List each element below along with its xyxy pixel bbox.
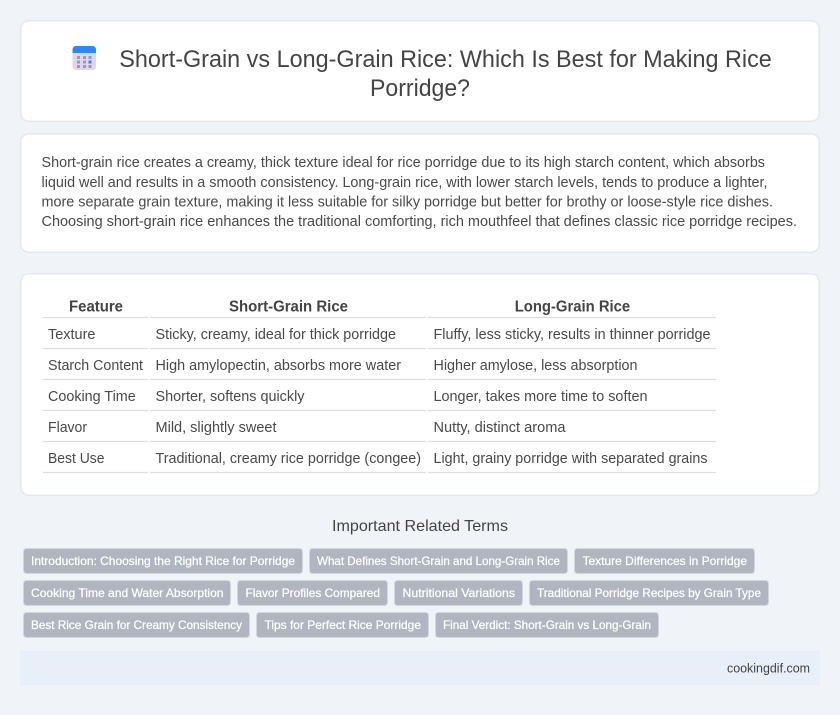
row: cooking time: Longer, takes more time to soften (434, 389, 648, 405)
chip: Tips for Perfect Rice Porridge (264, 618, 421, 632)
row: cooking time (43, 389, 716, 410)
panel: summary paragraph (21, 134, 819, 252)
title (119, 46, 772, 102)
summary text: more separate grain texture, making it less suitable for silky porridge but better for brothy or loose-style rice dishes. (42, 194, 773, 210)
table header: Feature (69, 298, 123, 316)
row: texture: Sticky, creamy, ideal for thick porridge (156, 327, 396, 343)
chip: Traditional Porridge Recipes by Grain Type (537, 586, 761, 600)
chip (310, 548, 568, 574)
chip (24, 580, 230, 606)
table header: Short-Grain Rice (229, 298, 348, 316)
summary text (42, 155, 797, 230)
title: Porridge? (370, 75, 470, 102)
chip (574, 548, 754, 574)
summary text: Choosing short-grain rice enhances the traditional comforting, rich mouthfeel that defines classic rice porridge recipes. (42, 214, 797, 230)
row: starch content: Starch Content (48, 358, 143, 374)
chip: Nutritional Variations (402, 586, 515, 600)
chip: What Defines Short-Grain and Long-Grain Rice (317, 554, 560, 568)
heading: related terms: Important Related Terms (332, 518, 508, 535)
row: starch content: Higher amylose, less absorption (434, 358, 638, 374)
table header (43, 298, 716, 318)
row: texture: Texture (48, 327, 96, 343)
chip (238, 580, 388, 606)
row: best use: Best Use (48, 451, 104, 467)
row: starch content: High amylopectin, absorbs more water (156, 358, 401, 374)
chip (256, 612, 428, 638)
row: flavor (43, 420, 716, 442)
row: flavor: Flavor (48, 420, 87, 436)
chip (394, 580, 522, 606)
row: cooking time: Shorter, softens quickly (156, 389, 305, 405)
summary text: Short-grain rice creates a creamy, thick texture ideal for rice porridge due to its high starch content, which absorbs (42, 155, 765, 171)
footer: cookingdif.com (727, 660, 810, 675)
table header: Long-Grain Rice (515, 298, 630, 316)
chip: Cooking Time and Water Absorption (31, 586, 224, 600)
chip (24, 548, 302, 574)
chip: Final Verdict: Short-Grain vs Long-Grain (443, 618, 651, 632)
panel: header (21, 21, 819, 121)
row: flavor: Mild, slightly sweet (156, 420, 276, 436)
chip: Introduction: Choosing the Right Rice for Porridge (31, 554, 295, 568)
related term chips (24, 548, 768, 638)
row: starch content (43, 358, 716, 380)
row: cooking time: Cooking Time (48, 389, 136, 405)
row: best use: Light, grainy porridge with separated grains (434, 451, 708, 467)
icon: calendar (72, 46, 96, 70)
row: best use: Traditional, creamy rice porridge (congee) (156, 451, 421, 467)
row: flavor: Nutty, distinct aroma (434, 420, 566, 436)
chip: Best Rice Grain for Creamy Consistency (31, 618, 242, 632)
chip: Flavor Profiles Compared (246, 586, 380, 600)
chip (436, 612, 658, 638)
chip (24, 612, 250, 638)
row: texture: Fluffy, less sticky, results in thinner porridge (434, 327, 710, 343)
panel: comparison table (21, 274, 819, 495)
chip (530, 580, 768, 606)
row: texture (43, 327, 716, 348)
row: best use (43, 451, 716, 472)
summary text: liquid well and results in a smooth consistency. Long-grain rice, with lower starch levels, tends to produce a lighter, (42, 175, 768, 191)
chip: Texture Differences in Porridge (582, 554, 747, 568)
title: Short-Grain vs Long-Grain Rice: Which Is Best for Making Rice (119, 46, 772, 73)
footer (20, 651, 820, 685)
